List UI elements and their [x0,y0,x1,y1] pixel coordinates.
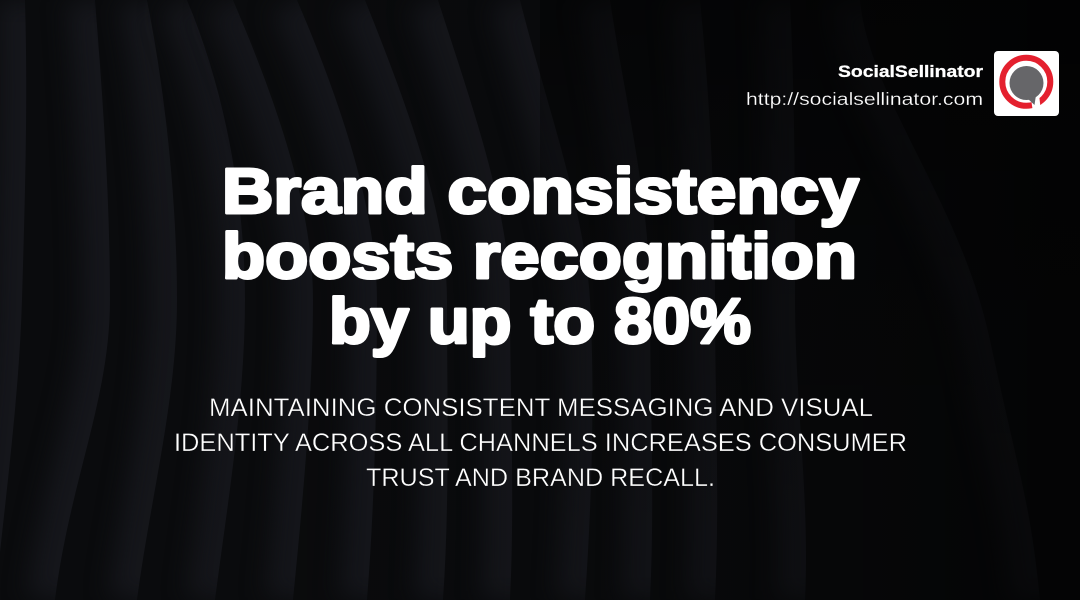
title: Brand consistency [222,155,859,227]
icon: SocialSellinator logo [994,51,1059,116]
description: MAINTAINING CONSISTENT MESSAGING AND VISUAL [209,394,873,422]
description: IDENTITY ACROSS ALL CHANNELS INCREASES CONSUMER [174,429,907,457]
description [174,394,907,492]
title: boosts recognition [222,220,857,292]
brand name: SocialSellinator [838,62,983,81]
description: TRUST AND BRAND RECALL. [366,464,715,492]
website url: http://socialsellinator.com [746,89,983,109]
title: by up to 80% [329,285,751,357]
title [222,155,859,357]
